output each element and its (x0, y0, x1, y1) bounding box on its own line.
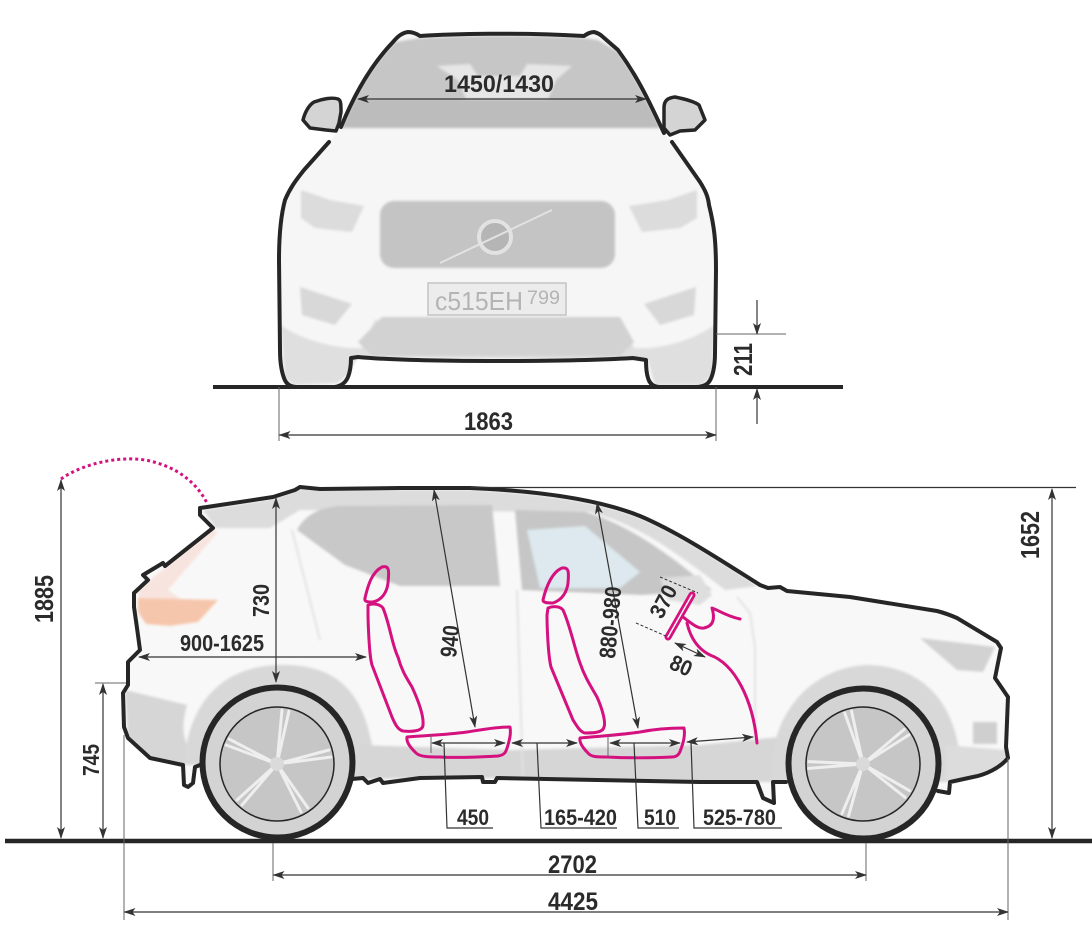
taillight (138, 598, 218, 626)
right headlight (629, 190, 697, 232)
rear seat outline (365, 567, 510, 757)
front side window (515, 510, 712, 595)
dimension: front cushion 510 (608, 735, 680, 830)
dimension: overall width 1863: 1863 (464, 408, 513, 436)
grille (380, 201, 615, 268)
dimension: overall length 4425 (124, 735, 1008, 920)
window reflection (527, 526, 640, 588)
rear wheel arch (184, 665, 372, 779)
front outline (279, 32, 716, 387)
dimension: tailgate open height 1885: 1885 (29, 575, 59, 623)
dimension: overall width 1863 (279, 387, 716, 441)
side view of car (123, 487, 1008, 838)
dimension: ground clearance 211 (716, 300, 786, 424)
dimension: rear/front shoulder width 1450/1430: 1450/1430 (444, 71, 554, 98)
dimension: boot height 730: 730 (248, 584, 274, 617)
license plate: с515ЕН (435, 286, 523, 316)
volvo logo (440, 210, 552, 263)
dimension: overall length 4425: 4425 (548, 888, 598, 916)
left headlight (301, 190, 364, 232)
door seams (292, 530, 755, 778)
rear wheel (202, 688, 352, 838)
dimension: rear cushion 450: 450 (457, 805, 489, 830)
front wheel arch (771, 665, 960, 782)
side ground line (5, 839, 1092, 843)
lower air intake (358, 317, 634, 356)
dimension: steering reach 80: 80 (666, 650, 696, 682)
front car shaded details (281, 36, 714, 385)
dimension: steering reach 80 (666, 643, 705, 682)
windshield highlight (437, 64, 572, 99)
dimension: rear headroom 940: 940 (435, 624, 464, 659)
steering wheel and pedal outline (668, 595, 757, 743)
dimension: wheelbase 2702 (273, 843, 866, 881)
front wheel (788, 688, 938, 838)
roof and spoiler band (203, 489, 758, 590)
left fog lamp (300, 287, 352, 325)
left mirror (303, 98, 341, 131)
dimension: boot length 900-1625: 900-1625 (180, 630, 264, 656)
dimension: load sill height 745: 745 (78, 744, 104, 776)
dimension: steering wheel diameter 370 (636, 577, 698, 637)
taillight strip (138, 530, 218, 600)
right fog lamp (644, 287, 696, 325)
dimension: front headroom 880-980: 880-980 (594, 585, 626, 659)
side car shaded details (125, 489, 1006, 782)
lower bumper shading (281, 320, 714, 385)
front ground line (213, 385, 843, 389)
dimension: front legroom 525-780 (687, 737, 782, 830)
dimension: rear cushion 450 (431, 735, 505, 830)
dimension: front cushion 510: 510 (644, 805, 676, 830)
rear side window (297, 505, 500, 586)
door mirror (660, 575, 712, 605)
dotted tailgate opening arc (61, 459, 207, 503)
front car body fill (279, 32, 716, 387)
front view of car (279, 32, 716, 387)
rear bumper shade (125, 690, 200, 765)
front bumper lower (945, 745, 1006, 782)
dimension: ground clearance 211: 211 (728, 343, 758, 376)
dimension: rear legroom 165-420 (512, 743, 617, 830)
front fog lamp (973, 722, 997, 744)
front seat outline (543, 568, 684, 758)
license plate: 799 (527, 288, 560, 309)
dimension: steering wheel diameter 370: 370 (644, 581, 682, 622)
license plate (428, 283, 566, 316)
dimension: rear legroom 165-420: 165-420 (544, 805, 617, 830)
dashboard band (342, 100, 660, 128)
lower door cladding (360, 735, 800, 782)
dimension: overall height 1652: 1652 (1015, 511, 1045, 559)
windshield (342, 36, 660, 128)
dimension: front headroom 880-980 (594, 503, 638, 728)
right mirror (664, 97, 705, 135)
dimension: wheelbase 2702: 2702 (548, 851, 597, 879)
side outline (123, 487, 1008, 803)
dimension: front legroom 525-780: 525-780 (703, 805, 776, 830)
dimension: rear headroom 940 (434, 490, 475, 727)
headlight (920, 638, 995, 672)
side body fill (123, 487, 1008, 803)
